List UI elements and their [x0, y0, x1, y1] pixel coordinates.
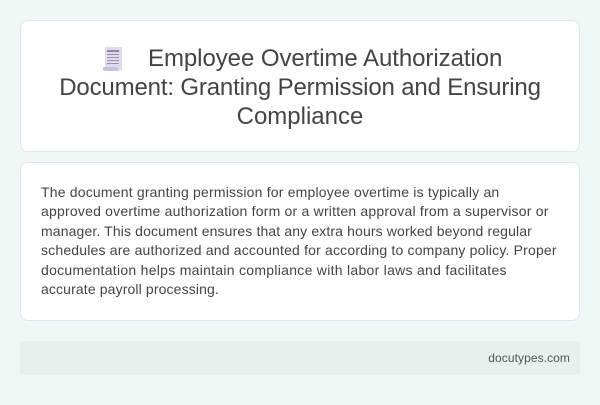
- text block: description: manager. This document ensures that any extra hours worked beyond regular: [41, 223, 532, 239]
- text block: description: schedules are authorized and accounted for according to company policy. Proper: [41, 242, 557, 258]
- text block: description: documentation helps maintain compliance with labor laws and facilitates: [41, 262, 507, 278]
- text block: description: accurate payroll processing.: [41, 281, 219, 297]
- footer source label: docutypes.com: [488, 351, 570, 365]
- text block: description: The document granting permission for employee overtime is typically an: [41, 184, 499, 200]
- title: [59, 45, 541, 130]
- text block: description: [41, 184, 557, 297]
- title: Compliance: [237, 103, 363, 130]
- panel: title card: [20, 20, 580, 152]
- footer bar: [20, 341, 580, 375]
- icon: document receipt: [103, 47, 122, 71]
- text block: description: approved overtime authorization form or a written approval from a supervisor or: [41, 203, 549, 219]
- panel: description card: [20, 162, 580, 321]
- title: Employee Overtime Authorization: [148, 45, 502, 72]
- title: Document: Granting Permission and Ensuring: [59, 74, 541, 101]
